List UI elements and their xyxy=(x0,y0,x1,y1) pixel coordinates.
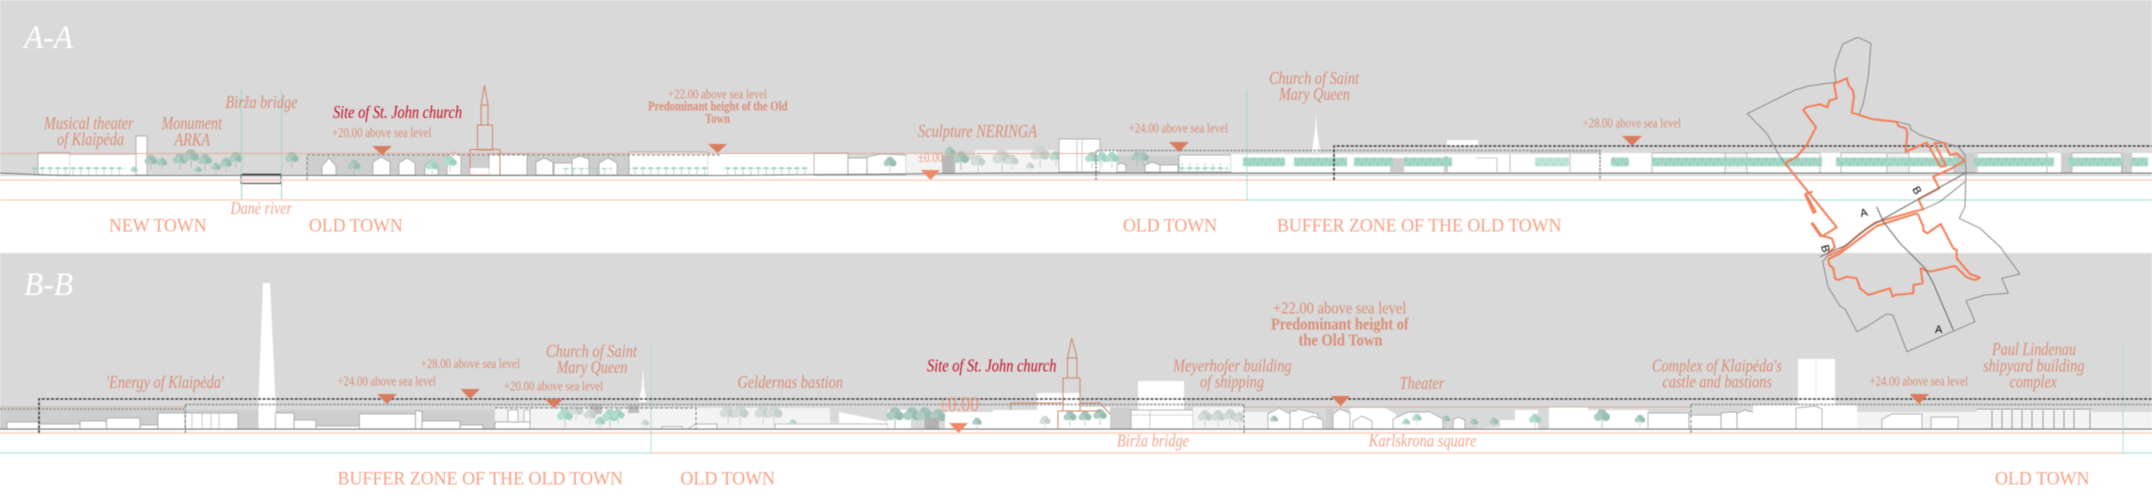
label: Paul Lindenau shipyard: shipyard building xyxy=(1983,356,2084,376)
zone: old town right: OLD TOWN xyxy=(1995,468,2090,489)
map: label B left: B xyxy=(1818,244,1832,254)
level: +20.00: +20.00 above sea level xyxy=(332,125,432,140)
title B-B: B-B xyxy=(24,267,73,303)
zone: buffer zone: BUFFER ZONE OF THE OLD TOWN xyxy=(338,468,623,489)
level: +20.00: +20.00 above sea level xyxy=(504,379,603,394)
level: +22.00 predominant height: the Old Town xyxy=(1298,331,1383,350)
labels A-A xyxy=(43,68,1681,237)
label: site of St. John church: Site of St. John church xyxy=(927,356,1056,376)
label: Karlskrona square: Karlskrona square xyxy=(1368,431,1476,451)
map: small orange bar xyxy=(1812,223,1822,237)
label: musical theater: Musical theater xyxy=(43,113,134,133)
map: section line A xyxy=(1877,207,1953,330)
label: Energy of Klaipėda: 'Energy of Klaipėda' xyxy=(106,372,225,392)
zone: new town: NEW TOWN xyxy=(109,216,207,237)
buildings: buffer zone xyxy=(1600,153,2152,173)
map: section line B xyxy=(1820,173,1966,257)
map: old town boundary xyxy=(1785,78,1980,297)
height lines A-A xyxy=(0,90,2152,200)
label: Theater: Theater xyxy=(1400,373,1445,393)
buildings: central old town xyxy=(708,113,1600,176)
triangle markers B-B xyxy=(377,389,1929,433)
level: +24.00: +24.00 above sea level xyxy=(338,374,436,389)
zone: buffer zone: BUFFER ZONE OF THE OLD TOWN xyxy=(1277,216,1562,237)
trees: monument ARKA xyxy=(145,149,299,175)
label: church of Saint Mary Queen: Church of Saint xyxy=(546,341,638,361)
height lines B-B xyxy=(0,343,2152,453)
level: +22.00 predominant height: Predominant height of the Old xyxy=(648,99,788,114)
level: +22.00 predominant height xyxy=(1271,298,1409,350)
title A-A: A-A xyxy=(22,20,74,56)
Geldernas bastion xyxy=(775,407,946,429)
ground line A-A xyxy=(0,173,2152,176)
label: complex of Klaipėda's castle: Complex of Klaipėda's xyxy=(1652,356,1782,376)
level: zero: ±0.00 xyxy=(918,150,943,166)
label: church of Saint Mary Queen: Church of Saint xyxy=(1269,68,1360,88)
map: label A bottom: A xyxy=(1935,324,1943,336)
label: Danė river: Danė river xyxy=(230,198,293,218)
label: Geldernas bastion: Geldernas bastion xyxy=(738,372,843,392)
buildings: buffer zone B-B xyxy=(7,411,483,429)
panel: section A-A background xyxy=(0,0,2152,176)
map: label B right: B xyxy=(1909,184,1923,197)
level: +22.00 predominant height: Town xyxy=(705,111,730,126)
label: Meyerhofer building of shipping: Meyerhofer building xyxy=(1172,356,1292,376)
label: Birža bridge: Birža bridge xyxy=(226,92,298,112)
buildings: castle and shipyard xyxy=(1753,359,2152,429)
old town houses xyxy=(322,152,708,175)
zone: old town 2: OLD TOWN xyxy=(1123,216,1217,237)
zone: old town: OLD TOWN xyxy=(680,468,775,489)
panel: section B-B background xyxy=(0,253,2152,430)
section B-B drawing xyxy=(0,283,2152,453)
label: site of St. John church: Site of St. John church xyxy=(333,102,462,122)
label: Birža bridge: Birža bridge xyxy=(1117,431,1189,451)
map: outer boundary xyxy=(1747,37,2020,352)
buildings: musical theater xyxy=(31,136,147,175)
level: +24.00: +24.00 above sea level xyxy=(1129,121,1228,136)
map: river line xyxy=(1923,182,1965,209)
label: monument ARKA: Monument xyxy=(161,113,223,133)
map: label A top: A xyxy=(1859,207,1869,220)
level: zero: ±0.00 xyxy=(938,392,979,416)
level: +28.00: +28.00 above sea level xyxy=(421,356,520,371)
site map with section lines xyxy=(1747,37,2020,352)
light area with trees: Church of Saint Mary Queen xyxy=(495,367,830,429)
triangle markers A-A xyxy=(372,136,1642,180)
section A-A drawing xyxy=(0,85,2152,200)
level: +22.00 predominant height: Predominant height of xyxy=(1271,314,1409,333)
river and bridge xyxy=(241,90,282,200)
zone: old town: OLD TOWN xyxy=(309,216,403,237)
level: +22.00 predominant height: +22.00 above sea level xyxy=(668,87,767,102)
level: +22.00 predominant height: +22.00 above sea level xyxy=(1273,298,1407,317)
label: Paul Lindenau shipyard: complex xyxy=(2010,372,2057,392)
houses: Theater and Karlskrona square xyxy=(1243,407,1762,429)
label: Meyerhofer building of shipping: of shipping xyxy=(1200,372,1264,392)
label: Paul Lindenau shipyard: Paul Lindenau xyxy=(1991,339,2076,359)
church of St. John outline xyxy=(470,85,500,175)
chimney 'Energy of Klaipėda' xyxy=(258,283,276,429)
tree rows: buffer zone xyxy=(1243,157,2148,167)
label: church of Saint Mary Queen: Mary Queen xyxy=(556,357,628,377)
label: monument ARKA: ARKA xyxy=(174,130,211,150)
label: complex of Klaipėda's castle: castle and bastions xyxy=(1662,372,1772,392)
level: +22.00 predominant height xyxy=(648,87,788,126)
labels B-B xyxy=(106,298,2090,489)
buildings: center B-B xyxy=(945,338,1247,429)
level: +28.00: +28.00 above sea level xyxy=(1583,116,1681,131)
label: musical theater: of Klaipėda xyxy=(57,129,124,149)
label: church of Saint Mary Queen: Mary Queen xyxy=(1278,84,1350,104)
level: +24.00 right: +24.00 above sea level xyxy=(1870,374,1968,389)
label: sculpture NERINGA: Sculpture NERINGA xyxy=(918,121,1038,141)
ground line B-B xyxy=(0,428,2152,430)
